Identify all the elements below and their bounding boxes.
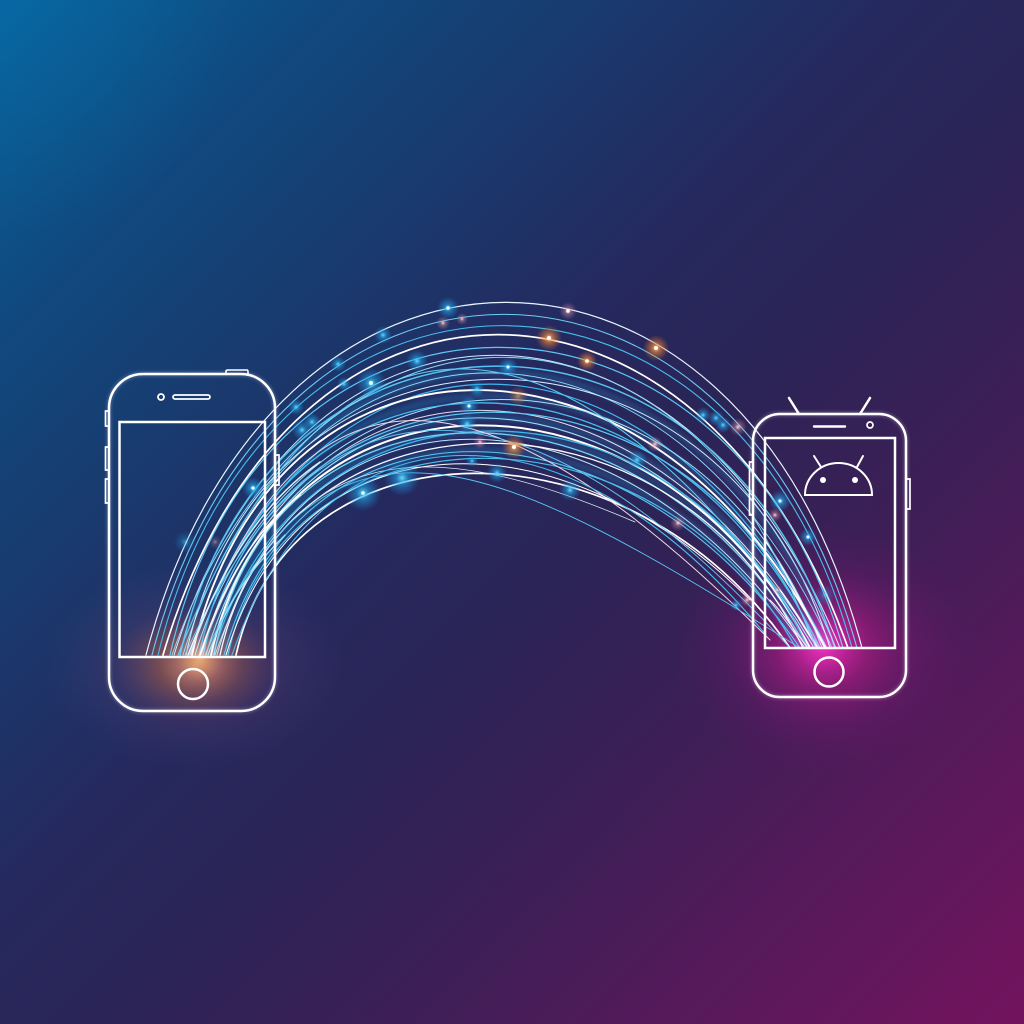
background corner light <box>0 0 240 240</box>
side buttons <box>750 462 910 515</box>
glow overlay on right fibres <box>776 601 868 689</box>
power button <box>226 370 248 374</box>
icon: android robot head <box>805 456 872 495</box>
speaker <box>814 425 845 428</box>
light particles along the arcs <box>174 297 836 611</box>
home button <box>814 658 844 686</box>
left fan highlights <box>188 462 320 655</box>
screen <box>765 438 895 648</box>
home button <box>178 669 208 699</box>
antennas <box>789 398 870 414</box>
screen <box>120 422 265 657</box>
data arcs between phones <box>146 302 862 655</box>
right fan highlights <box>780 590 818 648</box>
phone: left (iPhone outline) <box>106 370 279 711</box>
phone: right (Android outline) <box>750 398 910 697</box>
crossing fibres <box>190 421 770 655</box>
speaker <box>173 395 210 399</box>
glow beneath right phone <box>675 523 975 773</box>
camera <box>158 394 164 400</box>
soft halo of phone outlines <box>109 374 906 711</box>
phone body <box>109 374 275 711</box>
side button <box>276 455 279 485</box>
glow beneath left phone <box>45 560 345 770</box>
blurred glow of data arcs <box>183 372 832 655</box>
glow overlay on left fibres <box>158 614 242 702</box>
phone body <box>753 414 906 697</box>
camera <box>867 422 873 428</box>
volume buttons <box>106 411 108 503</box>
